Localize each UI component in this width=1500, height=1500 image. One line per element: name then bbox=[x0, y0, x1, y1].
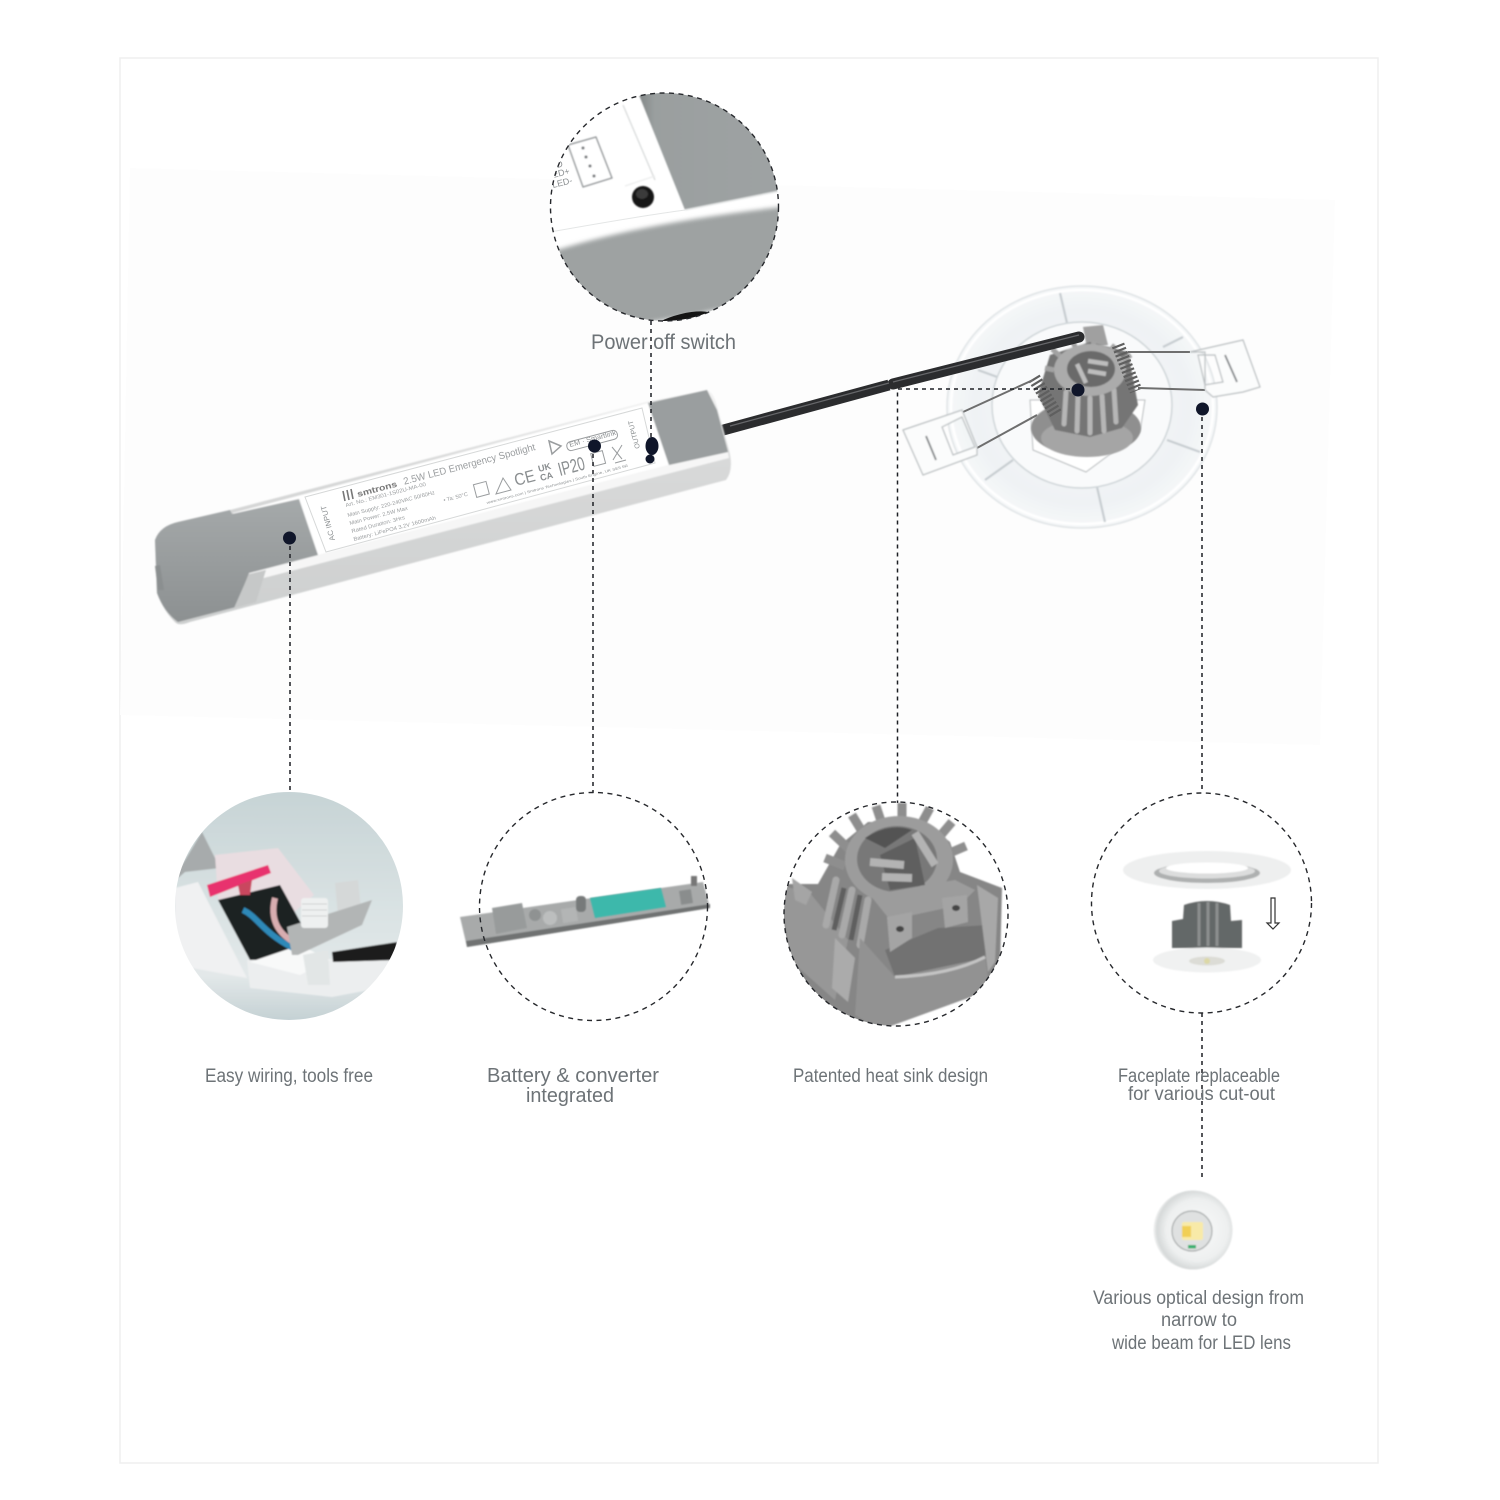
detail image bbox=[553, 93, 778, 321]
battery cell bbox=[590, 888, 666, 918]
heat sink render bbox=[780, 803, 1002, 1030]
driver label bbox=[305, 408, 655, 552]
certification marks: CA bbox=[539, 470, 555, 483]
caption: Various optical design from bbox=[1093, 1288, 1304, 1309]
down arrow bbox=[1267, 898, 1279, 929]
callout: optical lens bbox=[1093, 1190, 1304, 1354]
caption bbox=[487, 1065, 659, 1107]
circuit board bbox=[460, 876, 710, 947]
dashed ring bbox=[1092, 793, 1312, 1013]
callout: easy wiring bbox=[170, 788, 410, 1087]
callout: heat sink bbox=[780, 802, 1008, 1087]
label icons bbox=[473, 429, 626, 497]
exploded assembly bbox=[1123, 851, 1291, 972]
caption bbox=[1118, 1066, 1280, 1105]
certification marks: EM · Smartlink bbox=[569, 430, 617, 449]
callout: battery and converter bbox=[460, 792, 710, 1107]
specification lines: Rated Duration: 3Hrs bbox=[351, 515, 406, 535]
wiring photo bbox=[170, 788, 410, 1028]
callout: power off switch bbox=[550, 92, 780, 349]
specification lines: Main Power: 2.5W Max bbox=[349, 506, 409, 527]
brand mark bbox=[343, 489, 353, 501]
caption: Faceplate replaceable bbox=[1118, 1066, 1280, 1087]
driver body bbox=[155, 390, 731, 624]
detail image: ED+ bbox=[551, 166, 571, 180]
right spring clip bbox=[1190, 340, 1260, 397]
leader: optical lens bbox=[1201, 1013, 1203, 1178]
output marking: OUTPUT bbox=[627, 419, 642, 449]
leader: power off switch bbox=[650, 321, 652, 445]
certification marks bbox=[486, 430, 629, 505]
mounting springs bbox=[963, 345, 1205, 448]
detail image: D bbox=[555, 159, 564, 170]
caption: Power off switch bbox=[591, 331, 736, 354]
grey cable entry block bbox=[1083, 325, 1108, 348]
heat sink bbox=[1031, 341, 1141, 457]
marker dots bbox=[283, 384, 1209, 544]
caption: Patented heat sink design bbox=[793, 1066, 988, 1087]
specification lines: Art. No.: EM301-1S02U-MA-00 bbox=[345, 482, 427, 509]
caption: wide beam for LED lens bbox=[1111, 1333, 1291, 1354]
certification marks: www.smtrons.com | Smtrons Technologies | South Engine, UK SE5 9R bbox=[486, 464, 629, 505]
certification marks: UK bbox=[537, 461, 553, 474]
caption: Easy wiring, tools free bbox=[205, 1066, 373, 1087]
specification lines bbox=[345, 482, 469, 543]
brand and title: 2.5W LED Emergency Spotlight bbox=[402, 442, 537, 488]
caption bbox=[1093, 1288, 1304, 1354]
detail image: LED- bbox=[551, 175, 573, 190]
heat sink module bbox=[1172, 901, 1242, 948]
specification lines: Battery: LiFePO4 3.2V 1600mAh bbox=[353, 515, 437, 543]
cable bbox=[716, 335, 1079, 432]
brand and title: smtrons bbox=[356, 479, 398, 499]
LED lens bbox=[1154, 1190, 1232, 1270]
faint backdrop behind product bbox=[120, 168, 1335, 745]
left spring clip bbox=[903, 410, 977, 475]
brand and title bbox=[356, 442, 537, 500]
caption: for various cut-out bbox=[1128, 1084, 1276, 1105]
caption: integrated bbox=[526, 1085, 614, 1107]
product: LED driver bbox=[155, 390, 731, 624]
dashed ring bbox=[480, 792, 708, 1020]
dashed ring bbox=[784, 802, 1008, 1026]
product: spotlight fitting bbox=[716, 286, 1260, 528]
faceplate bbox=[1123, 851, 1291, 889]
leader: easy wiring bbox=[289, 538, 291, 793]
faceplate disc bbox=[947, 286, 1217, 528]
leader: battery bbox=[592, 446, 594, 793]
leader lines and markers bbox=[283, 321, 1209, 1178]
dashed ring bbox=[550, 93, 778, 321]
leader: heat sink bbox=[898, 389, 1078, 803]
certification marks: CE bbox=[512, 466, 537, 490]
callout: replaceable faceplate bbox=[1092, 793, 1312, 1105]
caption: narrow to bbox=[1161, 1310, 1237, 1331]
certification marks: IP20 bbox=[556, 454, 587, 481]
leader: faceplate bbox=[1201, 409, 1203, 793]
page frame bbox=[120, 58, 1378, 1463]
specification lines: Main Supply: 220-240VAC 50/60Hz bbox=[347, 490, 436, 519]
caption: Battery & converter bbox=[487, 1065, 659, 1087]
input marking: AC INPUT bbox=[319, 504, 337, 542]
specification lines: • Ta: 50°C bbox=[443, 492, 469, 504]
lens plate bbox=[1153, 948, 1261, 972]
